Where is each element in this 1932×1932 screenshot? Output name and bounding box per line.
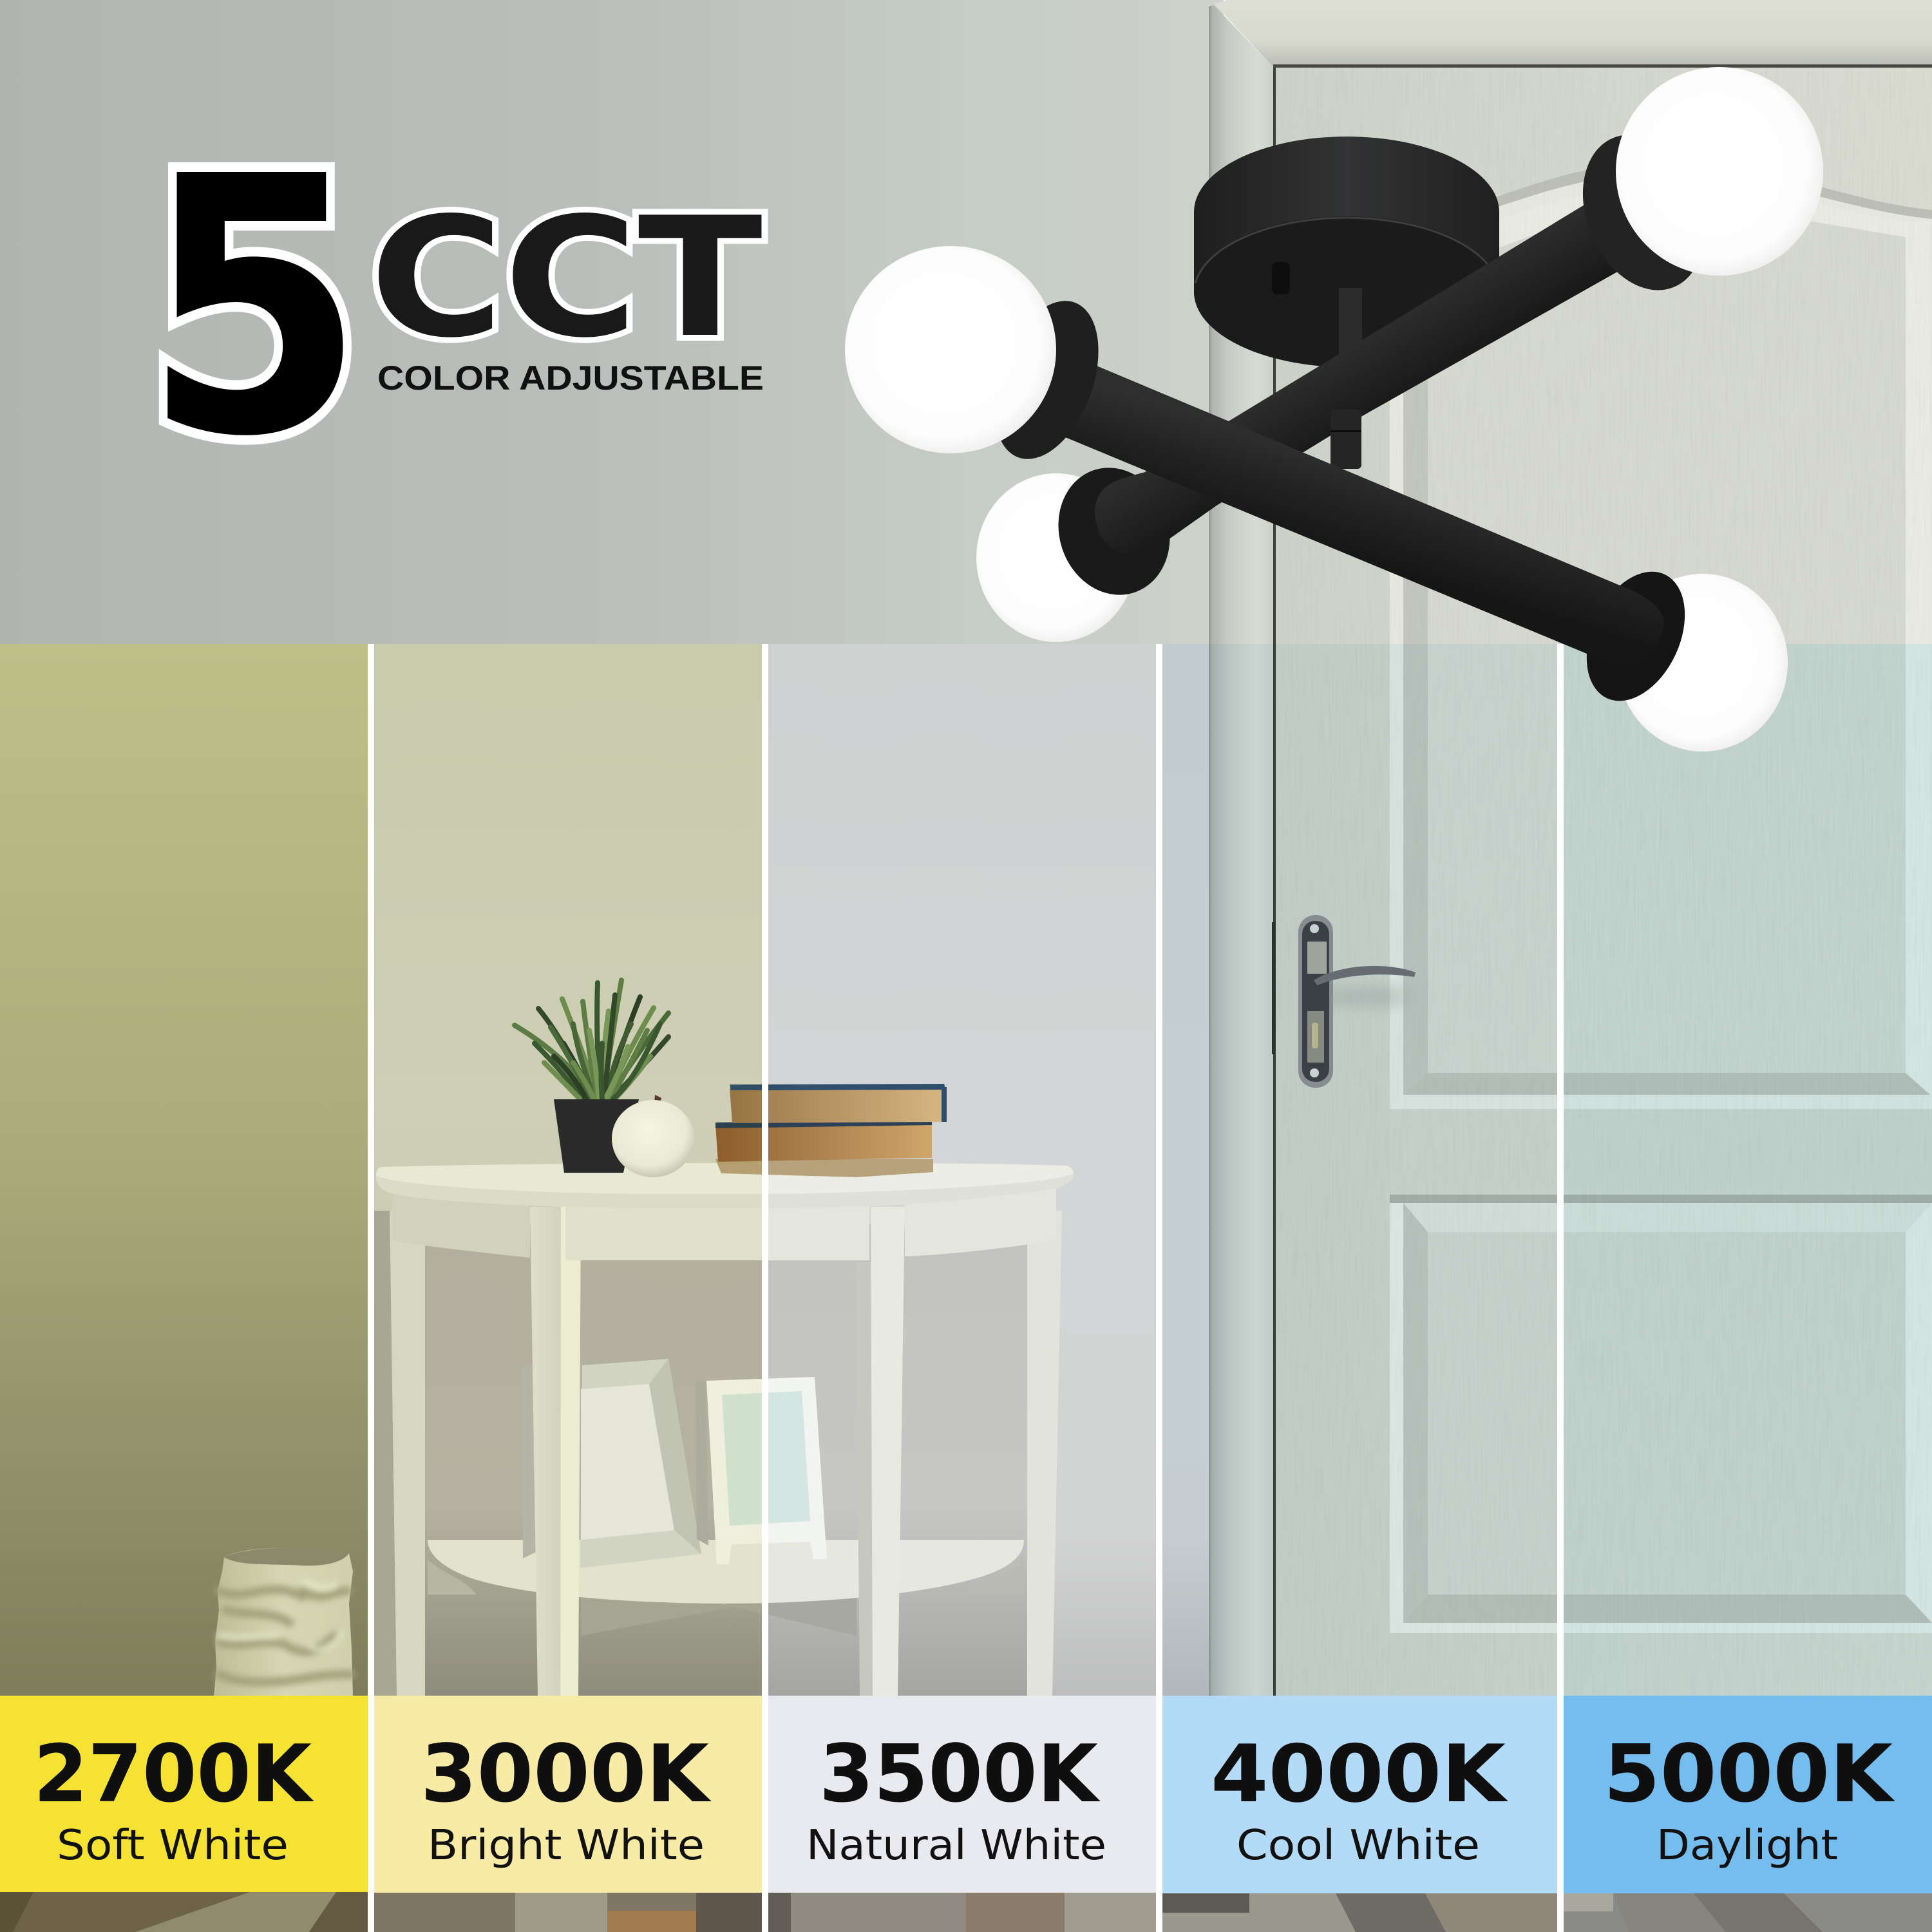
label bar: 5000K Daylight xyxy=(1564,1696,1932,1893)
color tint: 5000K xyxy=(1560,644,1932,1696)
icon: white apple xyxy=(612,1095,694,1177)
table interior recess, neutral side xyxy=(763,1224,1037,1696)
table interior recess, warm side xyxy=(412,1224,763,1696)
lamp canopy xyxy=(1194,137,1499,367)
icon: stacked books xyxy=(715,1084,947,1177)
flange: upper left xyxy=(975,287,1118,473)
lamp arm: front xyxy=(1061,365,1664,665)
label bar: 3500K Natural White: 3500K xyxy=(819,1728,1101,1821)
icon: table apron xyxy=(392,1179,1056,1260)
flange: lower left xyxy=(1042,453,1186,609)
bulb: lower left xyxy=(976,473,1136,642)
icon: door handle xyxy=(1272,915,1416,1088)
background: upper wall xyxy=(0,0,1224,644)
lamp screw xyxy=(1272,262,1290,294)
icon: table top xyxy=(376,1163,1074,1208)
label bar: 3000K Bright White: Bright White xyxy=(428,1822,705,1870)
lamp upper stem xyxy=(1339,288,1362,378)
panel: table scene wall xyxy=(370,644,1209,1696)
middle door rail xyxy=(1390,1109,1932,1195)
icon: back-right table leg xyxy=(1027,1211,1062,1696)
color tint: 4000K xyxy=(1156,644,1560,1696)
door frame gap xyxy=(1273,64,1932,1696)
icon: plant pot xyxy=(554,1099,639,1173)
icon: front-right table leg xyxy=(856,1207,905,1696)
table shadow on wall xyxy=(374,1211,413,1696)
flange: lower right xyxy=(1567,556,1704,717)
flange: upper right xyxy=(1561,117,1726,308)
subtitle: color adjustable: COLOR ADJUSTABLE xyxy=(377,359,764,397)
label bar: 5000K Daylight: Daylight xyxy=(1656,1822,1838,1870)
label bar: 5000K Daylight: 5000K xyxy=(1604,1728,1896,1821)
lamp lower stem xyxy=(1331,410,1361,469)
icon: silver picture frame xyxy=(522,1359,701,1568)
icon: ceramic vase xyxy=(214,1548,353,1696)
label bar: 4000K Cool White: 4000K xyxy=(1211,1728,1509,1821)
label bar: 3500K Natural White: Natural White xyxy=(806,1822,1106,1870)
upper door panel xyxy=(1390,161,1932,1109)
label bar: 4000K Cool White xyxy=(1162,1696,1557,1893)
lower door panel xyxy=(1390,1195,1932,1633)
label bar: 2700K Soft White xyxy=(0,1696,368,1892)
column dividers xyxy=(368,644,1564,1932)
door leaf xyxy=(1274,66,1932,1696)
color tint: 3000K xyxy=(370,644,763,1696)
lamp arm: back xyxy=(1095,201,1620,554)
panel: 2700K wall xyxy=(0,644,370,1696)
door casing side xyxy=(1209,5,1273,1696)
wood floor xyxy=(0,1887,1932,1932)
door grain texture xyxy=(1276,68,1932,1696)
title: CCT: CCT xyxy=(370,182,762,374)
icon: potted plant xyxy=(515,980,668,1173)
label bar: 4000K Cool White: Cool White xyxy=(1236,1822,1480,1870)
icon: back-left table leg xyxy=(390,1211,425,1696)
panel: door xyxy=(1209,0,1932,1696)
icon: lower shelf xyxy=(428,1540,1024,1636)
bulb: upper right xyxy=(1616,67,1823,276)
label bar: 2700K Soft White: 2700K xyxy=(33,1728,315,1821)
title: big 5: 5 xyxy=(143,101,365,514)
bulb: upper left xyxy=(845,246,1056,453)
icon: front-left table leg xyxy=(530,1207,581,1696)
label bar: 2700K Soft White: Soft White xyxy=(57,1822,289,1870)
icon: small white frame xyxy=(696,1377,827,1564)
icon: ceiling lamp xyxy=(845,67,1823,752)
label bar: 3500K Natural White xyxy=(768,1696,1156,1893)
label bar: 3000K Bright White xyxy=(374,1696,762,1893)
door casing top xyxy=(1214,0,1932,67)
label bar: 3000K Bright White: 3000K xyxy=(421,1728,712,1821)
bulb: lower right xyxy=(1618,574,1788,752)
